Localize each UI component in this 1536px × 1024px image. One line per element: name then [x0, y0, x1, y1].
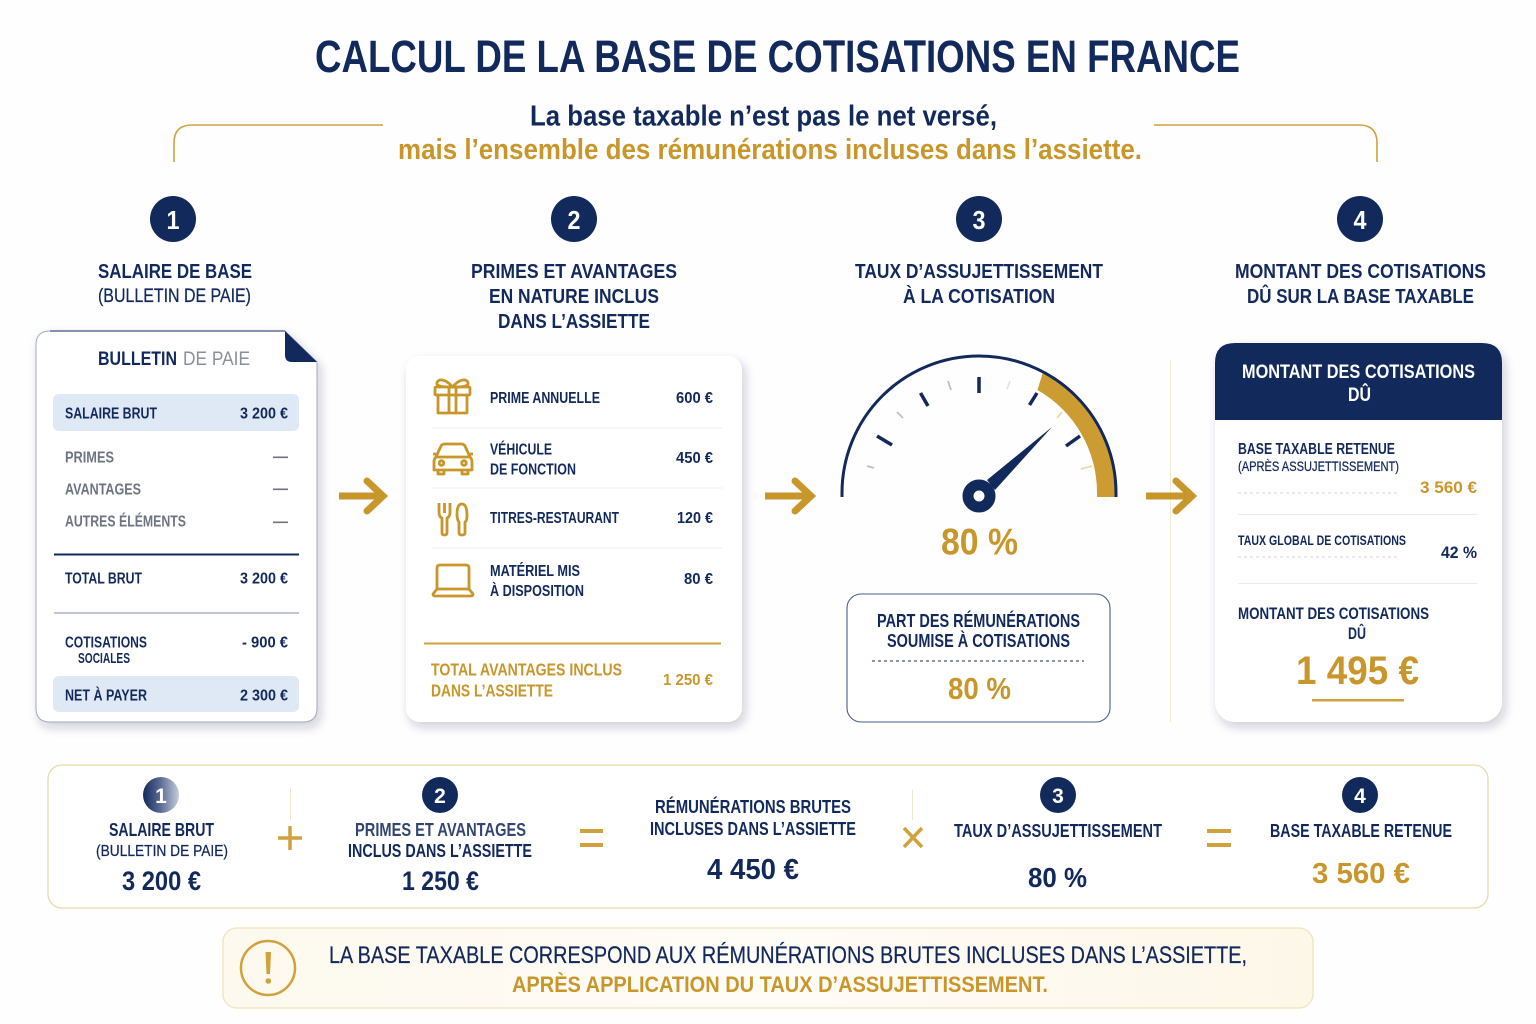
row: total brut — [65, 570, 288, 588]
formula: base taxable: 3 560 € — [1312, 858, 1410, 890]
row: net a payer: 2 300 € — [240, 688, 288, 704]
formula: taux — [954, 777, 1162, 893]
subtitle: mais l’ensemble des rémunérations incluses dans l’assiette. — [398, 134, 1142, 166]
step 1 heading: (BULLETIN DE PAIE) — [98, 286, 251, 307]
arrow 2 — [765, 481, 811, 511]
row: prime annuelle — [490, 390, 713, 407]
bulletin title: BULLETIN — [98, 349, 177, 370]
rows: primes, avantages, autres: AUTRES ÉLÉMENTS — [65, 512, 186, 530]
gauge ticks — [867, 377, 1092, 469]
formula: salaire brut: SALAIRE BRUT — [109, 820, 214, 840]
callout — [223, 928, 1313, 1008]
formula: primes: 1 250 € — [402, 866, 479, 896]
row: base taxable: 3 560 € — [1420, 478, 1478, 497]
row: taux global — [1238, 532, 1477, 562]
row: prime annuelle: PRIME ANNUELLE — [490, 390, 600, 407]
row: total avantages — [431, 660, 713, 700]
formula: primes: 2 — [434, 785, 446, 808]
row: salaire brut — [53, 394, 299, 431]
formula: primes — [348, 777, 532, 896]
row: total brut: 3 200 € — [240, 570, 288, 588]
gauge — [842, 356, 1116, 507]
formula: remunerations: INCLUSES DANS L’ASSIETTE — [650, 819, 856, 839]
subtitle: La base taxable n’est pas le net versé, — [530, 100, 997, 132]
formula: primes: PRIMES ET AVANTAGES — [355, 820, 526, 840]
row: total brut: TOTAL BRUT — [65, 570, 142, 588]
formula: salaire brut — [96, 777, 228, 896]
row: cotisations sociales: COTISATIONS — [65, 634, 147, 652]
equals sign 2 — [1207, 829, 1231, 847]
bulletin title — [98, 349, 250, 370]
subtitle — [398, 100, 1142, 166]
equals sign 1 — [580, 829, 603, 847]
gauge outer arc — [842, 356, 1116, 497]
formula: salaire brut: (BULLETIN DE PAIE) — [96, 843, 228, 860]
formula: remunerations: 4 450 € — [707, 854, 799, 886]
row: salaire brut: SALAIRE BRUT — [65, 406, 157, 422]
panel header — [1215, 343, 1502, 420]
arrow 3 — [1146, 481, 1192, 511]
arrow 1 — [339, 481, 383, 511]
formula: base taxable: BASE TAXABLE RETENUE — [1270, 821, 1452, 841]
row: cotisations sociales: - 900 € — [242, 634, 288, 652]
folded corner — [285, 331, 317, 362]
formula: taux: 3 — [1052, 785, 1064, 808]
row: total avantages: DANS L’ASSIETTE — [431, 680, 553, 700]
formula: remunerations — [650, 796, 856, 886]
step 3 heading — [855, 196, 1103, 308]
rows: primes, avantages, autres: PRIMES — [65, 450, 114, 466]
row: titres-restaurant: 120 € — [677, 510, 713, 527]
step 1 heading: 1 — [166, 205, 180, 235]
row: titres-restaurant: TITRES-RESTAURANT — [490, 510, 619, 527]
callout text: LA BASE TAXABLE CORRESPOND AUX RÉMUNÉRATIONS BRUTES INCLUSES DANS L’ASSIETTE, — [329, 942, 1247, 969]
icon: cutlery — [439, 503, 467, 535]
panel: bulletin de paie — [36, 331, 317, 722]
subtitle bracket — [174, 125, 1377, 162]
gauge pivot — [968, 485, 990, 507]
formula: taux: 80 % — [1028, 862, 1087, 893]
row: materiel: À DISPOSITION — [490, 583, 584, 600]
row: net a payer — [53, 676, 299, 712]
callout text — [329, 942, 1247, 997]
row: materiel: 80 € — [684, 571, 713, 588]
row: salaire brut: 3 200 € — [240, 406, 288, 422]
box: part des remunerations: SOUMISE À COTISATIONS — [887, 630, 1070, 651]
row: base taxable: (APRÈS ASSUJETTISSEMENT) — [1238, 459, 1399, 474]
row: materiel: MATÉRIEL MIS — [490, 563, 580, 580]
row: vehicule: DE FONCTION — [490, 462, 576, 478]
title: CALCUL DE LA BASE DE COTISATIONS EN FRANCE — [315, 31, 1240, 82]
box: part des remunerations: 80 % — [948, 671, 1011, 706]
formula: salaire brut: 1 — [155, 785, 167, 808]
panel header: MONTANT DES COTISATIONS — [1242, 361, 1475, 383]
icon: exclamation — [241, 941, 295, 995]
row: vehicule: VÉHICULE — [490, 442, 552, 458]
step 2 heading: 2 — [568, 205, 580, 235]
panel: formula — [48, 765, 1488, 908]
row: montant du: MONTANT DES COTISATIONS — [1238, 604, 1429, 623]
row: cotisations sociales: SOCIALES — [78, 650, 130, 667]
row: montant du: DÛ — [1348, 624, 1366, 643]
plus sign — [278, 826, 302, 850]
box: part des remunerations: PART DES RÉMUNÉRATIONS — [877, 610, 1080, 631]
step 2 heading: PRIMES ET AVANTAGES — [471, 260, 677, 283]
rows: primes, avantages, autres: AVANTAGES — [65, 482, 141, 498]
times sign — [904, 828, 922, 847]
row: total avantages: TOTAL AVANTAGES INCLUS — [431, 660, 622, 680]
row: base taxable: BASE TAXABLE RETENUE — [1238, 441, 1395, 458]
row: base taxable — [1238, 441, 1478, 497]
formula: remunerations: RÉMUNÉRATIONS BRUTES — [655, 796, 851, 817]
box: part des remunerations — [847, 594, 1110, 722]
formula: salaire brut: 3 200 € — [122, 866, 201, 896]
step 2 heading: DANS L’ASSIETTE — [498, 310, 650, 333]
step 3 heading: TAUX D’ASSUJETTISSEMENT — [855, 260, 1103, 283]
step 1 heading: SALAIRE DE BASE — [98, 260, 252, 283]
row: montant du: 1 495 € — [1296, 649, 1419, 693]
row: cotisations sociales — [65, 634, 288, 667]
gauge value: 80 % — [941, 522, 1018, 562]
step 1 heading — [98, 196, 252, 307]
row: prime annuelle: 600 € — [676, 390, 713, 407]
step 4 heading: MONTANT DES COTISATIONS — [1235, 260, 1486, 283]
step 4 heading — [1235, 196, 1486, 308]
formula: base taxable — [1270, 777, 1452, 890]
step 2 heading — [471, 196, 677, 333]
panel header: DÛ — [1348, 382, 1371, 406]
formula: taux: TAUX D’ASSUJETTISSEMENT — [954, 821, 1162, 841]
row: vehicule: 450 € — [676, 450, 713, 467]
step 4 heading: DÛ SUR LA BASE TAXABLE — [1247, 284, 1474, 308]
step 3 heading: 3 — [972, 205, 986, 235]
formula: base taxable: 4 — [1354, 785, 1366, 808]
rows: primes, avantages, autres — [65, 450, 288, 530]
icon: laptop — [433, 565, 473, 596]
row: total avantages: 1 250 € — [663, 672, 713, 689]
row: taux global: 42 % — [1441, 543, 1477, 562]
row: montant du — [1238, 604, 1429, 702]
gauge needle — [987, 427, 1052, 490]
panel: primes et avantages — [406, 356, 742, 722]
step 2 heading: EN NATURE INCLUS — [489, 285, 659, 308]
callout text: APRÈS APPLICATION DU TAUX D’ASSUJETTISSEMENT. — [512, 972, 1048, 997]
row: taux global: TAUX GLOBAL DE COTISATIONS — [1238, 532, 1406, 548]
bulletin title: DE PAIE — [183, 349, 250, 370]
row: materiel — [490, 563, 713, 600]
icon: gift — [435, 380, 470, 413]
gold gauge band — [1038, 372, 1116, 497]
panel: montant des cotisations — [1215, 343, 1502, 722]
icon: car — [433, 444, 473, 474]
formula: primes: INCLUS DANS L’ASSIETTE — [348, 841, 532, 861]
row: vehicule — [490, 442, 713, 478]
step 3 heading: À LA COTISATION — [903, 285, 1055, 308]
row: net a payer: NET À PAYER — [65, 686, 147, 704]
step 4 heading: 4 — [1354, 205, 1367, 235]
